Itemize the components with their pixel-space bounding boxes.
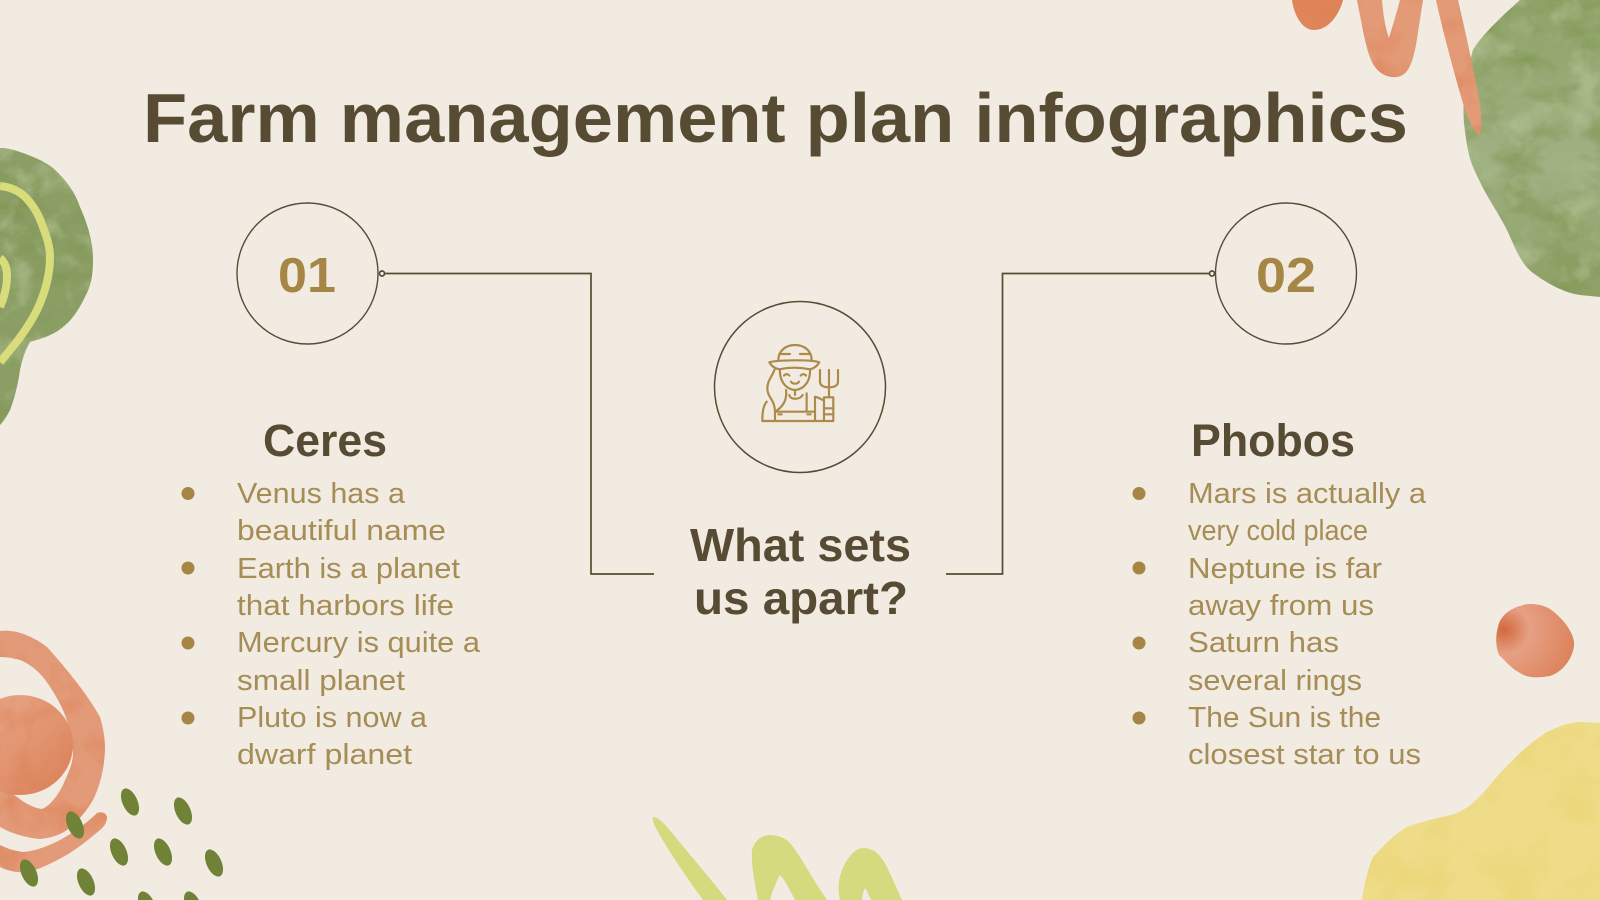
list: Phobos: closest star to us <box>1188 739 1421 771</box>
list: Phobos: Saturn has <box>1188 627 1339 659</box>
list: Phobos <box>1132 478 1426 771</box>
list: Phobos: away from us <box>1188 590 1374 622</box>
watercolor dot: right orange <box>1496 604 1574 677</box>
list: Ceres: Pluto is now a <box>237 702 427 734</box>
central circle <box>714 302 886 472</box>
watercolor blob: left green with yellow loop <box>0 148 93 425</box>
number badge 01 <box>237 203 378 344</box>
list: Ceres: Venus has a <box>237 478 405 510</box>
number badge 02: 02 <box>1256 249 1316 303</box>
list: Ceres: Earth is a planet <box>237 553 460 585</box>
watercolor swirl: bottom left orange <box>0 631 107 872</box>
list: Phobos: Neptune is far <box>1188 553 1383 585</box>
list: Ceres: dwarf planet <box>237 739 412 771</box>
list: Phobos: Mars is actually a <box>1188 478 1426 510</box>
number badge 02 <box>1216 203 1356 344</box>
connector: right <box>946 271 1214 574</box>
heading: Ceres: Ceres <box>263 415 387 466</box>
number badge 01: 01 <box>278 249 336 303</box>
watercolor scribble: top orange <box>1292 0 1481 136</box>
dashes: green dots bottom left <box>16 786 227 900</box>
watercolor scribble: bottom yellow-green <box>653 817 902 900</box>
watercolor blob: bottom right yellow <box>1362 722 1600 900</box>
central heading <box>690 519 911 624</box>
list: Phobos: several rings <box>1188 665 1362 697</box>
central heading: What sets <box>690 519 911 571</box>
title: Farm management plan infographics <box>143 79 1408 157</box>
central heading: us apart? <box>694 572 908 624</box>
list: Ceres: beautiful name <box>237 515 446 547</box>
list: Phobos: very cold place <box>1188 515 1368 547</box>
watercolor blob: top right green <box>1463 0 1600 297</box>
icon: farmer with pitchfork <box>762 345 838 421</box>
connector: left <box>380 271 654 574</box>
list: Ceres: that harbors life <box>237 590 454 622</box>
list: Ceres <box>182 478 480 771</box>
list: Ceres: Mercury is quite a <box>237 627 480 659</box>
list: Phobos: The Sun is the <box>1188 702 1381 734</box>
heading: Phobos: Phobos <box>1191 415 1355 466</box>
list: Ceres: small planet <box>237 665 405 697</box>
